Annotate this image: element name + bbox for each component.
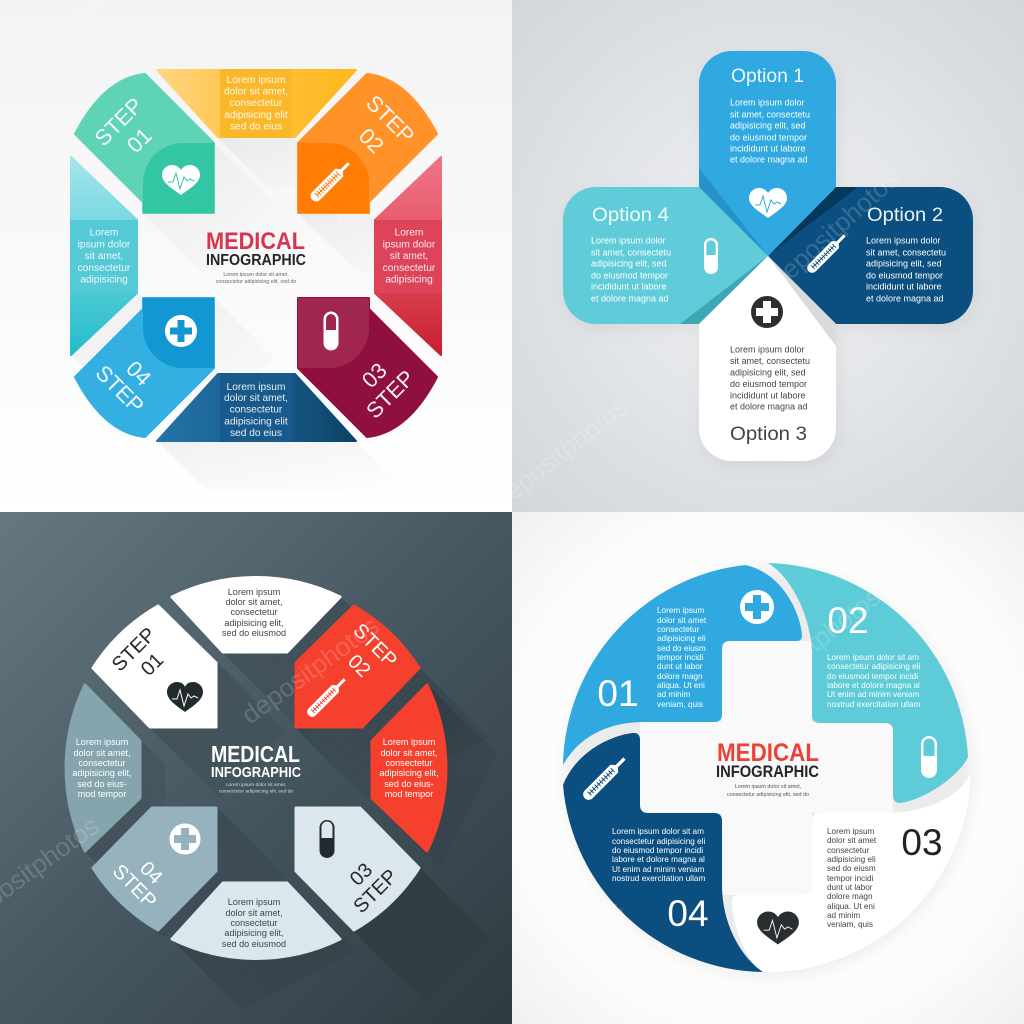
segment: aqua text block: sit amet, <box>85 251 123 262</box>
text: 03: tempor incidi <box>827 874 874 883</box>
label: step 04: STEP <box>108 860 160 913</box>
text: 03: consectetur <box>827 846 870 855</box>
text: option 4: do eiusmod tempor <box>591 270 668 280</box>
number: 04: 04 <box>667 893 709 934</box>
segment: aqua text block: ipsum dolor <box>78 240 131 250</box>
text: option 3: et dolore magna ad <box>730 402 808 412</box>
title block: Lorem ipsum dolor sit amet, <box>223 272 289 278</box>
watermark: depositphotos <box>764 164 904 294</box>
label: step 04: 04 <box>121 356 156 391</box>
segment: white text block: consectetur <box>230 607 278 617</box>
title block <box>211 741 301 794</box>
text: 03: dolor sit amet <box>827 836 877 845</box>
segment: white text block: sed do eiusmod <box>222 628 286 638</box>
segment: step 02 <box>296 606 419 727</box>
watermark: depositphotos <box>489 894 629 1024</box>
text: option 2: et dolore magna ad <box>866 294 944 304</box>
number: 03: 03 <box>901 822 943 863</box>
panel: circular cross infographic <box>489 512 1024 1024</box>
text: 01: dolore magn <box>657 672 703 681</box>
label: step 03: 03 <box>357 358 392 393</box>
text: option 2: incididunt ut labore <box>866 282 942 292</box>
segment: red text block: adipisicing elit, <box>379 768 439 778</box>
segment: pale text block: Lorem ipsum <box>228 897 280 907</box>
segment: yellow text block: dolor sit amet, <box>224 86 288 98</box>
text: option 4: Lorem ipsum dolor <box>591 236 666 246</box>
icon: pill <box>324 312 338 350</box>
segment: step 01 <box>93 606 216 727</box>
watermark: depositphotos <box>740 581 886 705</box>
text: 03: dolore magn <box>827 892 873 901</box>
text: option 3: do eiusmod tempor <box>730 379 807 389</box>
panel: dark circular infographic <box>0 512 512 1024</box>
text: option 2: do eiusmod tempor <box>866 270 943 280</box>
segment: navy text block: dolor sit amet, <box>224 393 288 404</box>
icon: medical plus <box>751 296 783 328</box>
segment: aqua text block <box>70 157 138 355</box>
text: option 3: sit amet, consectetu <box>730 356 810 366</box>
label: step 03: STEP <box>361 365 419 423</box>
text: option 4: adipisicing elit, sed <box>591 258 667 268</box>
label: step 02: 02 <box>343 651 374 682</box>
text: 03: Lorem ipsum <box>827 827 875 836</box>
number: 01: 01 <box>597 673 639 714</box>
arm: option 2 <box>768 187 973 324</box>
label: step 03: STEP <box>350 865 402 918</box>
text: option 2: adipisicing elit, sed <box>866 258 942 268</box>
text: 04: Lorem ipsum dolor sit am <box>612 827 704 836</box>
segment: red text block: sed do eius- <box>384 779 434 789</box>
segment: navy text block: consectetur <box>230 404 283 416</box>
text: option 3: incididunt ut labore <box>730 390 806 400</box>
segment: yellow text block: sed do eius <box>230 122 282 132</box>
text: 04: nostrud exercitation ullam <box>612 874 705 883</box>
segment: navy text block: adipisicing elit <box>224 416 288 428</box>
segment: navy text block: Lorem ipsum <box>227 382 285 393</box>
label: step 02: STEP <box>349 620 401 672</box>
segment: aqua text block: consectetur <box>78 263 131 274</box>
text: 04: labore et dolore magna al <box>612 855 705 864</box>
segment: red text block: ipsum dolor <box>383 240 436 250</box>
segment: pale text block: consectetur <box>230 918 278 928</box>
segment: step 02 <box>298 74 437 213</box>
label: option 1: Option 1 <box>731 65 804 87</box>
segment: grey text block: sed do eius- <box>77 779 127 789</box>
panel: colourful rounded-square infographic <box>0 0 512 512</box>
text: 01: veniam, quis <box>657 700 703 709</box>
label: step 01: 01 <box>137 649 168 680</box>
icon: medical plus <box>740 590 774 624</box>
icon: thermometer <box>807 234 846 273</box>
label: step 01: 01 <box>122 123 157 158</box>
text: 02: Ut enim ad minim veniam <box>827 690 920 699</box>
text: option 2: Lorem ipsum dolor <box>866 236 941 246</box>
arm: option 4 <box>563 187 768 324</box>
segment: step 04 <box>75 298 214 437</box>
icon: pill <box>320 820 334 858</box>
text: 03: adipisicing eli <box>827 855 876 864</box>
title block: INFOGRAPHIC <box>206 252 306 269</box>
text: 01: tempor incidi <box>657 653 704 662</box>
segment: grey text block: mod tempor <box>78 789 126 799</box>
segment: grey text block: dolor sit amet, <box>73 748 131 758</box>
segment: aqua text block: Lorem <box>90 228 118 238</box>
icon: heart <box>749 188 787 218</box>
segment: white text block: Lorem ipsum <box>228 587 280 597</box>
title block <box>716 739 819 798</box>
title block: INFOGRAPHIC <box>716 763 819 781</box>
text: 03: sed do eiusm <box>827 864 876 873</box>
text: 02: Lorem ipsum dolor sit am <box>827 653 919 662</box>
text: 01: Lorem ipsum <box>657 606 705 615</box>
segment: white text block: adipisicing elit, <box>224 618 284 628</box>
watermark <box>74 73 438 438</box>
text: option 1: sit amet, consectetu <box>730 110 810 120</box>
label: step 01: STEP <box>108 624 160 676</box>
watermark: depositphotos <box>240 181 386 305</box>
text: 01: aliqua. Ut eni <box>657 681 705 690</box>
text: 02: labore et dolore magna al <box>827 681 920 690</box>
text: 01: sed do eiusm <box>657 644 706 653</box>
text: option 1: do eiusmod tempor <box>730 132 807 142</box>
segment: white text block <box>172 578 340 652</box>
segment: pale text block: adipisicing elit, <box>224 928 284 938</box>
segment: grey text block: consectetur <box>78 758 126 768</box>
text: option 1: adipisicing elit, sed <box>730 120 806 130</box>
icon: thermometer <box>581 755 628 802</box>
segment: grey text block: adipisicing elit, <box>72 768 132 778</box>
text: option 2: sit amet, consectetu <box>866 248 946 258</box>
segment: red text block: Lorem <box>395 228 423 238</box>
text: option 3: adipisicing elit, sed <box>730 368 806 378</box>
text: option 1: Lorem ipsum dolor <box>730 98 805 108</box>
segment: 02 <box>768 563 968 803</box>
segment: yellow text block: Lorem ipsum <box>227 75 285 86</box>
text: 01: consectetur <box>657 625 700 634</box>
text: option 4: incididunt ut labore <box>591 282 667 292</box>
segment: red text block <box>374 157 442 355</box>
text: 04: consectetur adipisicing eli <box>612 837 705 846</box>
watermark <box>489 581 1024 1024</box>
title block: MEDICAL <box>211 741 300 767</box>
text: 01: adipisicing eli <box>657 634 706 643</box>
title block: consectetur adipisicing elit, sed do <box>727 792 809 798</box>
icon: medical plus <box>165 315 197 347</box>
segment: 01 <box>563 565 802 765</box>
segment: red text block: dolor sit amet, <box>380 748 438 758</box>
segment: red text block: adipisicing <box>385 274 433 286</box>
label: option 3: Option 3 <box>730 423 807 445</box>
title block: INFOGRAPHIC <box>211 764 301 781</box>
text: 04: do eiusmod tempor incidi <box>612 846 703 855</box>
soft cross shadow <box>588 91 974 464</box>
icon: heart <box>757 912 799 944</box>
segment: pale text block <box>172 883 340 958</box>
label: step 04 <box>96 362 151 408</box>
text: 02: consectetur adipisicing eli <box>827 662 920 671</box>
icon: heart <box>167 682 203 712</box>
segment: red text block: consectetur <box>383 263 436 274</box>
segment: step 01 <box>75 74 214 213</box>
text: 03: veniam, quis <box>827 920 873 929</box>
label: step 02: STEP <box>361 90 419 148</box>
text: 03: aliqua. Ut eni <box>827 902 875 911</box>
segment: 04 <box>563 733 763 972</box>
segment: aqua text block: adipisicing <box>80 274 128 286</box>
text: option 1: incididunt ut labore <box>730 144 806 154</box>
label: step 02: 02 <box>354 123 389 158</box>
number: 02: 02 <box>827 600 869 641</box>
label: option 4: Option 4 <box>592 204 669 226</box>
segment: red text block: mod tempor <box>385 789 433 799</box>
text: 03: dunt ut labor <box>827 883 873 892</box>
label: step 03: 03 <box>346 859 377 890</box>
icon: pill <box>921 736 937 778</box>
title block <box>206 232 306 284</box>
title block: Lorem ipsum dolor sit amet, <box>226 782 286 788</box>
segment: grey text block <box>66 685 140 851</box>
icon: pill <box>704 238 718 274</box>
text: 04: Ut enim ad minim veniam <box>612 865 705 874</box>
text: 02: do eiusmod tempor incidi <box>827 672 918 681</box>
label: step 04: STEP <box>91 360 149 418</box>
segment: step 04 <box>93 808 216 930</box>
icon: medical plus <box>170 824 200 854</box>
text: 03: ad minim <box>827 911 860 920</box>
label: step 04: 04 <box>135 858 166 889</box>
segment: yellow text block: adipisicing elit <box>224 110 288 121</box>
segment: yellow text block <box>157 69 356 138</box>
text: option 1: et dolore magna ad <box>730 154 808 164</box>
watermark: depositphotos <box>487 391 633 515</box>
text: option 4: sit amet, consectetu <box>591 248 671 258</box>
arm: option 1 <box>699 51 836 256</box>
segment: 03 <box>732 772 971 972</box>
text: 02: nostrud exercitation ullam <box>827 700 920 709</box>
icon: thermometer <box>310 162 350 202</box>
title block: consectetur adipisicing elit, sed do <box>219 788 294 794</box>
segment: step 03 <box>298 298 437 437</box>
title block: consectetur adipisicing elit, sed do <box>216 279 296 285</box>
text: 01: dolor sit amet <box>657 616 707 625</box>
title block: Lorem ipsum dolor sit amet, <box>735 784 802 790</box>
icon: thermometer <box>305 676 348 719</box>
panel: option cross infographic <box>487 0 1024 515</box>
label: option 2: Option 2 <box>867 204 943 226</box>
icon: heart <box>162 165 200 195</box>
watermark: depositphotos <box>236 610 385 730</box>
segment: red text block: Lorem ipsum <box>383 737 435 747</box>
segment: grey text block: Lorem ipsum <box>76 737 128 747</box>
segment: yellow text block: consectetur <box>230 98 283 109</box>
title block: MEDICAL <box>717 739 819 767</box>
watermark <box>0 610 385 930</box>
text: 01: ad minim <box>657 690 690 699</box>
arm: option 3 <box>699 256 836 461</box>
text: 01: dunt ut labor <box>657 662 703 671</box>
text: option 3: Lorem ipsum dolor <box>730 344 805 354</box>
segment: step 03 <box>296 808 419 930</box>
segment: navy text block <box>157 373 356 442</box>
segment: white text block: dolor sit amet, <box>225 597 283 607</box>
title block: MEDICAL <box>206 228 305 255</box>
segment: red text block <box>372 685 446 851</box>
segment: red text block: sit amet, <box>390 251 428 262</box>
segment: pale text block: dolor sit amet, <box>225 908 283 918</box>
segment: pale text block: sed do eiusmod <box>222 939 286 949</box>
label: step 01: STEP <box>90 93 148 151</box>
text: option 4: et dolore magna ad <box>591 294 669 304</box>
segment: red text block: consectetur <box>385 758 433 768</box>
segment: navy text block: sed do eius <box>230 428 282 439</box>
